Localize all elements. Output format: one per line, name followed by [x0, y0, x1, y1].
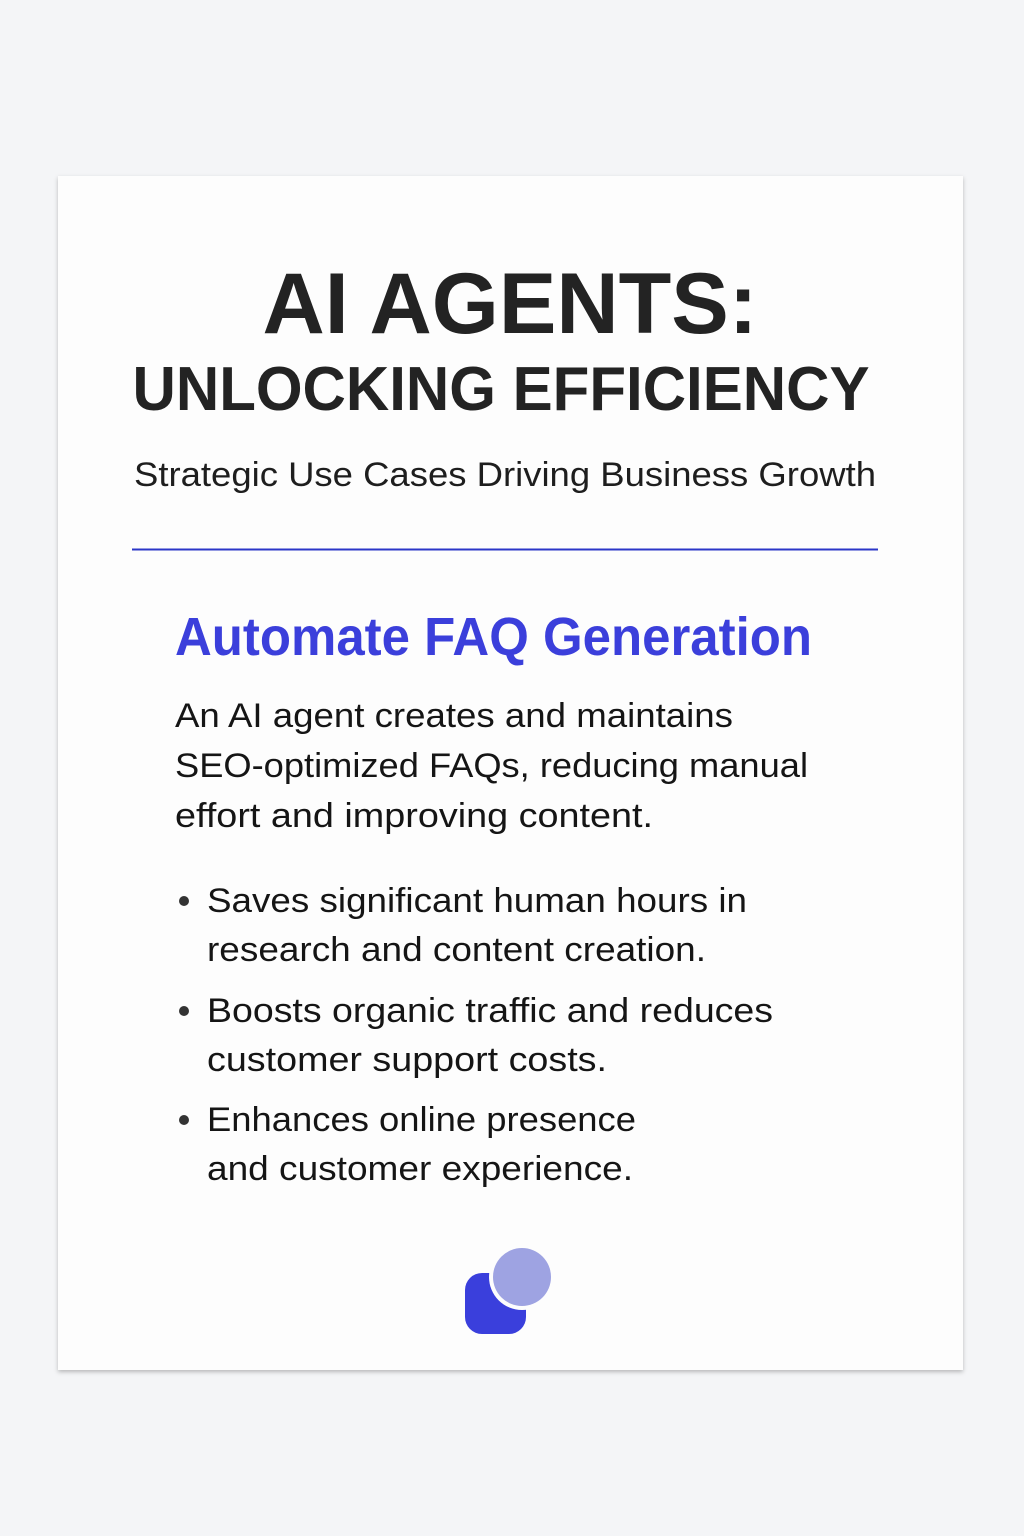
description text: effort and improving content. — [175, 797, 653, 835]
section heading: Automate FAQ Generation — [175, 607, 812, 667]
icon: logo — [465, 1244, 555, 1334]
panel: card — [58, 176, 963, 1370]
description text: An AI agent creates and maintains — [175, 697, 733, 735]
bullet list: Enhances online presence — [207, 1101, 636, 1139]
bullet list: customer support costs. — [207, 1041, 607, 1079]
subtitle heading: UNLOCKING EFFICIENCY — [132, 355, 870, 424]
title: AI AGENTS: — [262, 256, 758, 352]
description text — [175, 697, 808, 835]
tagline: Strategic Use Cases Driving Business Growth — [134, 456, 876, 494]
description text: SEO-optimized FAQs, reducing manual — [175, 747, 808, 785]
bullet list: and customer experience. — [207, 1150, 633, 1188]
bullet list: Boosts organic traffic and reduces — [207, 992, 773, 1030]
bullet list — [179, 882, 773, 1188]
bullet list: research and content creation. — [207, 931, 706, 969]
bullet list: Saves significant human hours in — [207, 882, 747, 920]
